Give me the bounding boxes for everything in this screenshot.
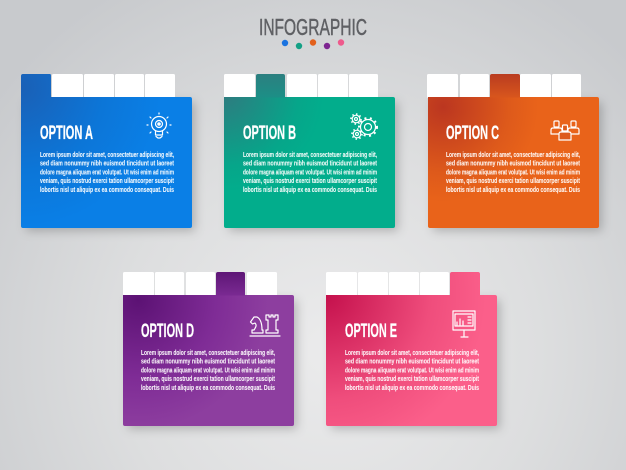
icon: gears (351, 114, 377, 139)
heading D: OPTION D (141, 321, 194, 342)
body text E: Lorem ipsum dolor sit amet, consectetuer adipiscing elit, (345, 350, 479, 357)
body text A: sed diam nonummy nibh euismod tincidunt ut laoreet (40, 161, 175, 168)
active tab D (216, 272, 245, 296)
body text D: lobortis nisl ut aliquip ex ea commodo consequat. Duis (141, 385, 275, 392)
panel: option E (326, 272, 500, 429)
body text A: lobortis nisl ut aliquip ex ea commodo consequat. Duis (40, 187, 174, 194)
title: INFOGRAPHIC (259, 14, 367, 40)
white tabs A (52, 74, 175, 98)
card body B (224, 97, 395, 228)
panel: option A (21, 74, 195, 231)
body text C: lobortis nisl ut aliquip ex ea commodo consequat. Duis (446, 187, 580, 194)
card body D (123, 295, 294, 426)
body text E: lobortis nisl ut aliquip ex ea commodo consequat. Duis (345, 385, 479, 392)
white tabs C (427, 74, 581, 98)
body text E (345, 350, 480, 392)
body text C: veniam, quis nostrud exerci tation ullamcorper suscipit (446, 178, 580, 185)
body text B: lobortis nisl ut aliquip ex ea commodo consequat. Duis (243, 187, 377, 194)
body text B: Lorem ipsum dolor sit amet, consectetuer adipiscing elit, (243, 152, 377, 159)
heading C: OPTION C (446, 123, 499, 144)
body text D: dolore magna aliquam erat volutpat. Ut wisi enim ad minim (141, 367, 275, 374)
body text A (40, 152, 175, 194)
body text A: dolore magna aliquam erat volutpat. Ut wisi enim ad minim (40, 169, 174, 176)
panel: option D (123, 272, 297, 429)
panel: option B (224, 74, 398, 231)
active tab B (256, 74, 285, 98)
body text B: sed diam nonummy nibh euismod tincidunt ut laoreet (243, 161, 378, 168)
heading E: OPTION E (345, 321, 397, 342)
white tabs D (123, 272, 277, 296)
body text D: sed diam nonummy nibh euismod tincidunt ut laoreet (141, 359, 276, 366)
card body with active tab A (21, 74, 192, 228)
decorative coloured dots (282, 39, 344, 49)
body text B (243, 152, 378, 194)
body text C: sed diam nonummy nibh euismod tincidunt ut laoreet (446, 161, 581, 168)
white tabs E (326, 272, 449, 296)
body text B: veniam, quis nostrud exerci tation ullamcorper suscipit (243, 178, 377, 185)
body text C (446, 152, 581, 194)
body text A: Lorem ipsum dolor sit amet, consectetuer adipiscing elit, (40, 152, 174, 159)
icon: team of people (551, 121, 579, 140)
icon: chess pieces (250, 315, 280, 336)
body text A: veniam, quis nostrud exerci tation ullamcorper suscipit (40, 178, 174, 185)
body text D: veniam, quis nostrud exerci tation ullamcorper suscipit (141, 376, 275, 383)
body text E: dolore magna aliquam erat volutpat. Ut wisi enim ad minim (345, 367, 479, 374)
white tabs B (224, 74, 378, 98)
card body with active tab E (326, 272, 497, 426)
body text E: veniam, quis nostrud exerci tation ullamcorper suscipit (345, 376, 479, 383)
body text B: dolore magna aliquam erat volutpat. Ut wisi enim ad minim (243, 169, 377, 176)
card body C (428, 97, 599, 228)
panel: option C (427, 74, 602, 231)
heading B: OPTION B (243, 123, 296, 144)
body text E: sed diam nonummy nibh euismod tincidunt ut laoreet (345, 359, 480, 366)
heading A: OPTION A (40, 123, 93, 144)
body text D (141, 350, 276, 392)
icon: presentation board (453, 311, 475, 337)
active tab C (490, 74, 520, 98)
body text D: Lorem ipsum dolor sit amet, consectetuer adipiscing elit, (141, 350, 275, 357)
icon: light bulb (147, 113, 171, 138)
